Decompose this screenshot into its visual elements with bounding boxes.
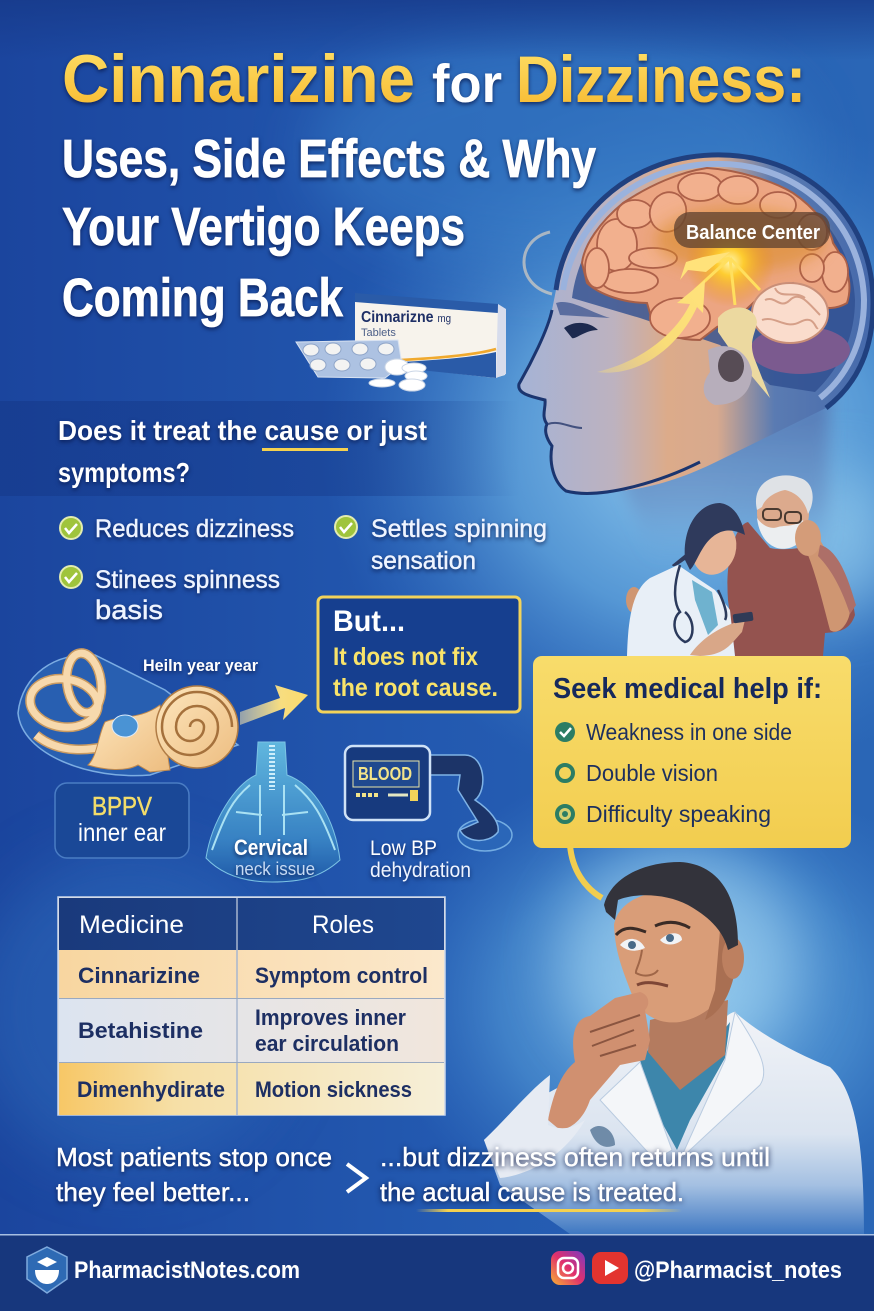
title: Dizziness: xyxy=(516,42,806,116)
medicine table: Cinnarizine xyxy=(78,963,200,988)
signal arrow xyxy=(597,280,705,373)
footer bar: PharmacistNotes.com xyxy=(74,1257,300,1284)
youtube icon xyxy=(592,1252,628,1284)
brainstem xyxy=(718,307,770,398)
cervical illustration: neck issue xyxy=(235,859,315,879)
but callout: the root cause. xyxy=(333,674,498,702)
hand xyxy=(548,992,650,1130)
face xyxy=(614,891,735,1022)
cervical illustration xyxy=(206,742,340,882)
neck xyxy=(648,1000,728,1090)
brain folds xyxy=(585,173,848,338)
ear xyxy=(704,346,752,405)
seek medical help panel: Seek medical help if: xyxy=(553,673,822,705)
bppv label: BPPV xyxy=(92,791,153,821)
shirt xyxy=(640,1022,730,1150)
blister pack xyxy=(296,340,427,391)
blood pressure monitor xyxy=(345,746,512,851)
medicine table: Betahistine xyxy=(78,1018,203,1043)
orbit swirl xyxy=(524,232,552,294)
brain cerebrum xyxy=(582,168,849,340)
but callout: It does not fix xyxy=(333,643,478,671)
lips xyxy=(548,423,582,428)
closing message xyxy=(56,1142,770,1212)
title: Cinnarizine xyxy=(62,41,415,117)
medicine table xyxy=(58,897,445,1115)
low bp label xyxy=(370,837,471,882)
cerebellum xyxy=(750,326,850,374)
benefits checklist xyxy=(60,515,547,625)
neck xyxy=(620,395,830,560)
title: for xyxy=(432,54,502,114)
coat pocket xyxy=(590,1126,615,1147)
head silhouette xyxy=(519,155,873,493)
doctor and patient illustration xyxy=(626,475,856,656)
title: Your Vertigo Keeps xyxy=(62,197,465,257)
closing message: the actual cause is treated. xyxy=(380,1177,684,1207)
benefits checklist: Reduces dizziness xyxy=(95,515,294,543)
balance label xyxy=(674,212,830,248)
closing message: ...but dizziness often returns until xyxy=(380,1142,770,1172)
question band: symptoms? xyxy=(58,457,190,488)
coat xyxy=(484,1012,864,1234)
hair xyxy=(604,862,738,950)
medicine box and tablets: Tablets xyxy=(361,327,396,339)
medicine table: Dimenhydirate xyxy=(77,1077,225,1102)
medicine table: Symptom control xyxy=(255,963,428,988)
eye xyxy=(564,323,598,338)
seek medical help panel xyxy=(533,656,851,898)
benefits checklist: Stinees spinness xyxy=(95,566,280,594)
bppv label xyxy=(55,783,189,858)
inner ear illustration xyxy=(18,651,258,776)
sleeve xyxy=(484,1075,585,1178)
title xyxy=(62,41,806,328)
closing message: Most patients stop once xyxy=(56,1142,332,1172)
inner head dark area xyxy=(572,172,855,392)
seek medical help panel: Weakness in one side xyxy=(586,719,792,745)
head illustration with brain xyxy=(519,155,873,560)
nurse xyxy=(626,587,642,613)
low bp label: dehydration xyxy=(370,859,471,882)
closing message: they feel better... xyxy=(56,1177,250,1207)
glow xyxy=(655,208,825,272)
low bp label: Low BP xyxy=(370,837,437,860)
question band xyxy=(0,401,520,496)
seek medical help panel: Double vision xyxy=(586,760,718,786)
title: Coming Back xyxy=(62,268,344,328)
medicine table: Medicine xyxy=(79,911,184,939)
cervical illustration: Cervical xyxy=(234,835,308,860)
footer bar xyxy=(0,1234,874,1311)
bppv label: inner ear xyxy=(78,819,166,847)
medicine table: Roles xyxy=(312,911,374,939)
footer bar: @Pharmacist_notes xyxy=(634,1257,842,1284)
thinking doctor illustration xyxy=(484,862,864,1234)
question band: Does it treat the cause or just xyxy=(58,415,427,446)
benefits checklist: basis xyxy=(95,595,163,625)
instagram icon xyxy=(551,1251,585,1285)
medicine box and tablets xyxy=(296,293,506,391)
inner ear illustration: Heiln year year xyxy=(143,656,258,675)
blood pressure monitor: BLOOD xyxy=(358,764,412,784)
but callout: But... xyxy=(333,605,405,638)
medicine box and tablets: Cinnarizne mg xyxy=(361,309,451,326)
arrow to callout xyxy=(240,685,308,725)
eyes xyxy=(620,933,682,951)
medicine table: Motion sickness xyxy=(255,1077,412,1102)
head illustration with brain: Balance Center xyxy=(686,222,820,244)
medicine table: ear circulation xyxy=(255,1031,399,1056)
benefits checklist: sensation xyxy=(371,547,476,575)
medicine table: Improves inner xyxy=(255,1005,406,1030)
seek medical help panel: Difficulty speaking xyxy=(586,801,771,827)
ear xyxy=(722,937,744,979)
patient xyxy=(727,522,855,656)
lapels xyxy=(600,1012,764,1160)
but callout xyxy=(318,597,520,712)
logo shield xyxy=(27,1247,67,1293)
title: Uses, Side Effects & Why xyxy=(62,129,596,189)
benefits checklist: Settles spinning xyxy=(371,515,547,543)
